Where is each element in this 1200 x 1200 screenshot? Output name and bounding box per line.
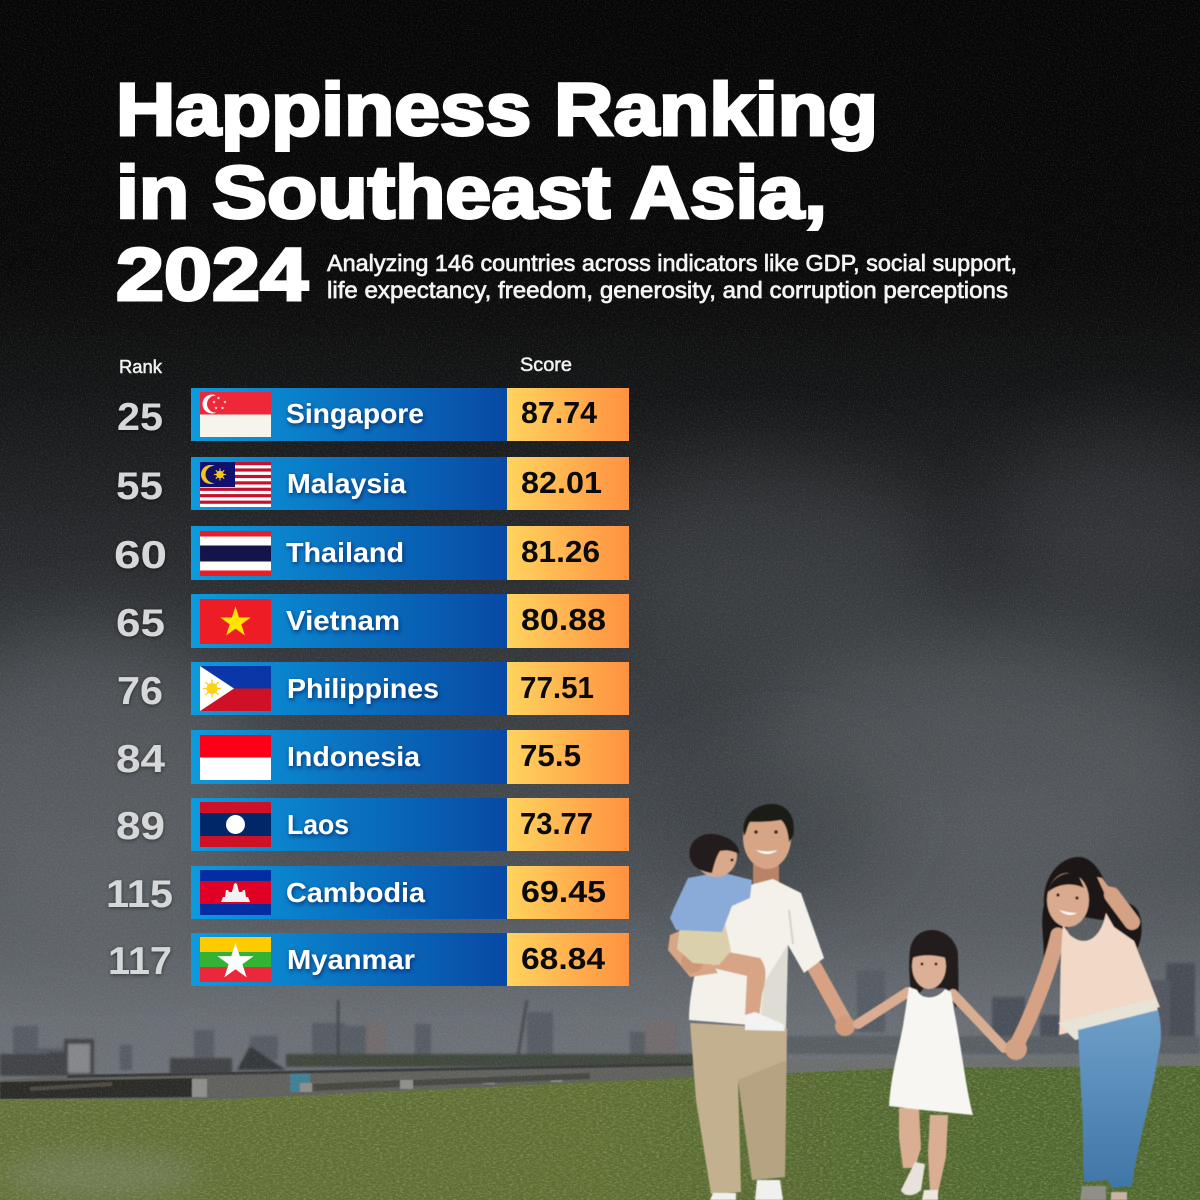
ranking numbers: 60 xyxy=(114,534,167,577)
country names: Laos xyxy=(287,809,349,840)
country names: Vietnam xyxy=(286,605,400,636)
grass field xyxy=(0,1066,1200,1200)
score values: 77.51 xyxy=(520,670,594,705)
column heading: rank: Rank xyxy=(119,357,163,377)
flag: Singapore xyxy=(200,392,271,437)
flag: Cambodia xyxy=(200,870,271,915)
column heading: score: Score xyxy=(520,355,572,376)
country names: Malaysia xyxy=(287,468,406,499)
father carrying son xyxy=(668,804,855,1200)
ranking numbers: 115 xyxy=(106,873,173,916)
score values: 68.84 xyxy=(521,941,606,976)
ranking numbers: 89 xyxy=(116,805,165,848)
title xyxy=(116,68,878,316)
daughter xyxy=(858,930,1004,1200)
city skyline xyxy=(0,963,1200,1076)
score bars xyxy=(507,388,629,986)
country names: Singapore xyxy=(286,398,424,429)
country names xyxy=(286,398,439,975)
flag: Myanmar xyxy=(200,937,271,982)
subtitle: Analyzing 146 countries across indicators like GDP, social support, xyxy=(327,250,1017,276)
flag: Thailand xyxy=(200,531,271,576)
country names: Philippines xyxy=(287,673,439,704)
ranking numbers: 25 xyxy=(117,396,163,439)
score values: 80.88 xyxy=(521,602,606,637)
ranking numbers xyxy=(106,396,173,983)
country names: Myanmar xyxy=(287,944,415,975)
family illustration xyxy=(668,804,1161,1200)
title year: 2024 xyxy=(116,233,308,316)
ranking numbers: 55 xyxy=(116,465,163,508)
flag: Philippines xyxy=(200,666,271,711)
subtitle xyxy=(327,250,1017,303)
flag: Laos xyxy=(200,802,271,847)
flag: Vietnam xyxy=(200,599,271,644)
country names: Thailand xyxy=(286,537,404,568)
mother xyxy=(1005,857,1161,1200)
ranking numbers: 76 xyxy=(117,670,163,713)
subtitle: life expectancy, freedom, generosity, and corruption perceptions xyxy=(327,277,1008,303)
country bars xyxy=(191,388,508,986)
country names: Indonesia xyxy=(287,741,420,772)
ranking numbers: 117 xyxy=(108,940,172,983)
score values: 81.26 xyxy=(521,534,600,569)
score values: 69.45 xyxy=(521,874,606,909)
score values: 82.01 xyxy=(521,465,602,500)
embankment wall xyxy=(0,1056,1200,1099)
flag: Malaysia xyxy=(200,462,271,507)
ranking numbers: 84 xyxy=(116,738,165,781)
score values: 73.77 xyxy=(520,806,593,841)
score values: 75.5 xyxy=(520,738,581,773)
score values xyxy=(520,395,606,976)
title line 2: in Southeast Asia, xyxy=(116,151,827,234)
score values: 87.74 xyxy=(521,395,598,430)
flag: Indonesia xyxy=(200,735,271,780)
title line 1: Happiness Ranking xyxy=(116,68,878,151)
ranking numbers: 65 xyxy=(116,602,165,645)
country names: Cambodia xyxy=(286,877,425,908)
